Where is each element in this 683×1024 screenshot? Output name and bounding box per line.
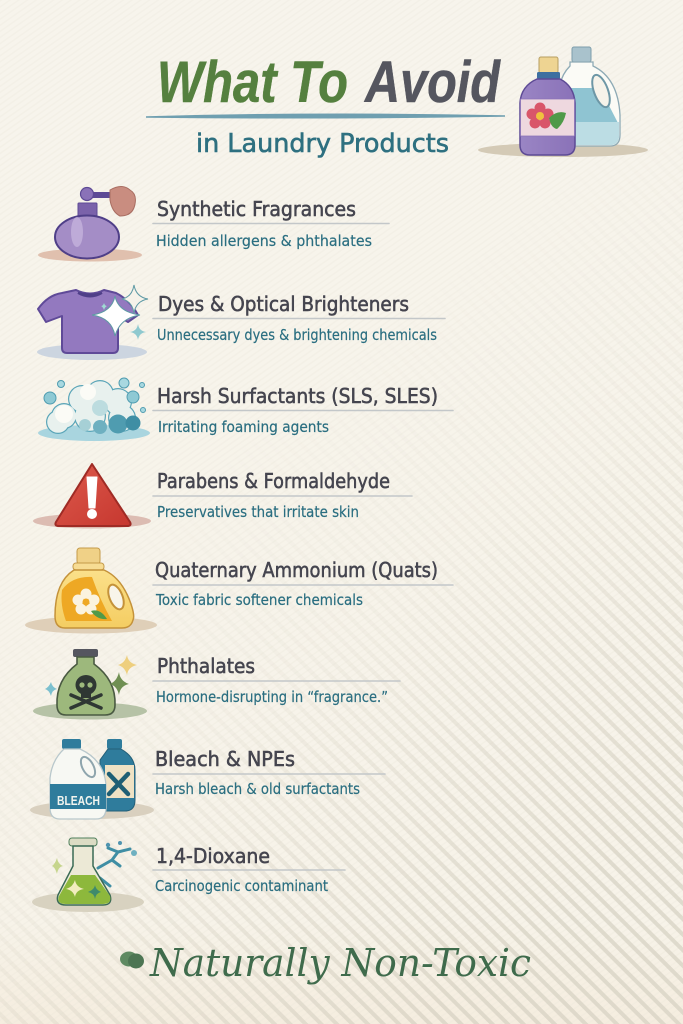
- footer brand: [120, 941, 531, 985]
- icon: yellow softener jug: [25, 548, 157, 634]
- description: Hormone-disrupting in “fragrance.”: [156, 688, 388, 706]
- heading: Parabens & Formaldehyde: [157, 469, 390, 493]
- description: Hidden allergens & phthalates: [156, 232, 372, 250]
- item: 1,4-Dioxane: [32, 838, 345, 912]
- heading: 1,4-Dioxane: [156, 844, 270, 868]
- item: Dyes & Optical Brighteners: [37, 285, 445, 360]
- description: Unnecessary dyes & brightening chemicals: [157, 326, 437, 344]
- description: Harsh bleach & old surfactants: [155, 780, 360, 798]
- icon: leaf blob: [120, 952, 144, 968]
- icon: bleach bottles: BLEACH: [57, 793, 100, 808]
- icon: chemistry flask: [32, 838, 144, 912]
- icon: t-shirt with sparkles: [37, 285, 148, 360]
- footer text: Naturally Non-Toxic: [149, 941, 531, 985]
- title: What To: [157, 50, 348, 115]
- item: Harsh Surfactants: [38, 378, 453, 441]
- description: Irritating foaming agents: [158, 418, 329, 436]
- title: Avoid: [363, 50, 501, 115]
- heading: Harsh Surfactants (SLS, SLES): [157, 384, 438, 408]
- heading: Phthalates: [157, 654, 255, 678]
- background paper: [0, 298, 683, 1024]
- icon: perfume bottle: [38, 186, 142, 262]
- item: Quaternary Ammonium: [25, 548, 453, 634]
- icon: warning triangle: [33, 464, 151, 528]
- description: Carcinogenic contaminant: [155, 877, 328, 895]
- icon: poison bottle: [33, 649, 147, 720]
- heading: Quaternary Ammonium (Quats): [155, 558, 438, 582]
- title: [157, 50, 501, 115]
- item: Bleach & NPEs: [30, 739, 385, 819]
- heading: Bleach & NPEs: [155, 747, 295, 771]
- heading: Dyes & Optical Brighteners: [158, 292, 409, 316]
- description: Preservatives that irritate skin: [157, 503, 359, 521]
- icon: bleach bottles: [30, 739, 154, 819]
- heading: Synthetic Fragrances: [157, 197, 356, 221]
- subtitle: in Laundry Products: [196, 129, 449, 159]
- icon: foam bubbles: [38, 378, 150, 441]
- title underline: [146, 114, 505, 118]
- item: Parabens & Formaldehyde: [33, 464, 412, 528]
- item: Synthetic Fragrances: [38, 186, 389, 262]
- item: Phthalates: [33, 649, 400, 720]
- description: Toxic fabric softener chemicals: [155, 591, 363, 609]
- icon: laundry bottles: [478, 47, 648, 157]
